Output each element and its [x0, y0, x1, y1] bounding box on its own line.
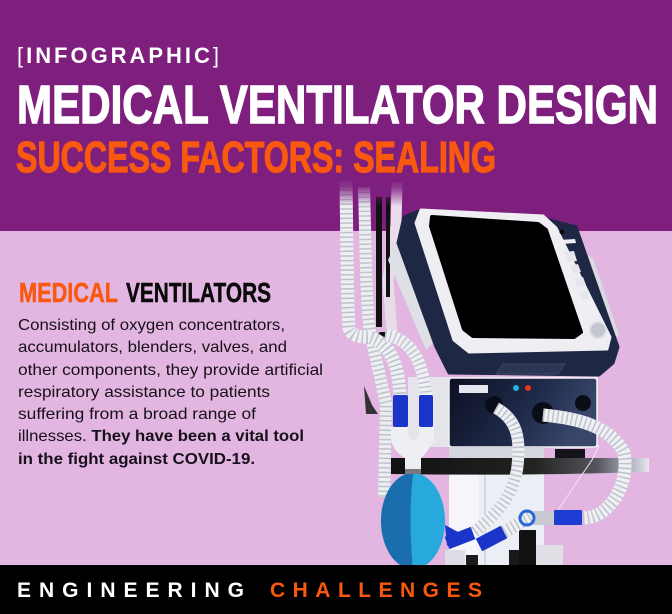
breathing bag: [381, 469, 445, 569]
monitor dark housing: [398, 211, 618, 375]
footer heading: engineering challenges: [17, 579, 482, 602]
text block: description: accumulators, blenders, valves, and: [18, 339, 287, 356]
footer heading: engineering challenges: ENGINEERING: [17, 579, 244, 602]
mounting rods: [364, 197, 400, 414]
top fade into header: [340, 180, 402, 205]
panel: purple header: [0, 0, 672, 231]
heading: medical ventilators: MEDICAL: [19, 277, 118, 308]
heading: medical ventilators: VENTILATORS: [126, 277, 271, 308]
control unit body: [408, 377, 598, 447]
base column: [445, 470, 563, 565]
kicker: infographic: [INFOGRAPHIC]: [17, 43, 219, 68]
subtitle: SUCCESS FACTORS: SEALING: [16, 133, 496, 182]
text block: description: in the fight against COVID-19.: [18, 451, 255, 468]
monitor white frame: [416, 210, 610, 352]
hose and lower connectors: [445, 510, 582, 546]
third hose: [385, 335, 426, 397]
left hose: [346, 180, 400, 396]
heading: medical ventilators: [19, 277, 271, 308]
footer bar: [0, 565, 672, 614]
monitor grey back plate: [388, 243, 433, 350]
text block: description: respiratory assistance to patients: [18, 384, 270, 401]
far hose behind monitor: [388, 182, 397, 335]
text block: description: other components, they provide artificial: [18, 362, 323, 379]
text block: description: suffering from a broad range of: [18, 406, 257, 423]
status lights: [513, 385, 531, 391]
panel: pink body: [0, 231, 672, 565]
screen: [431, 217, 581, 337]
illustration: medical ventilator machine: [338, 178, 649, 569]
monitor right edge: [586, 255, 619, 338]
thin wire: [558, 445, 599, 510]
text block: description: [18, 317, 323, 468]
text block: description: illnesses. They have been a vital tool: [18, 428, 304, 445]
knobs: [485, 395, 591, 424]
text block: description: Consisting of oxygen concentrators,: [18, 317, 285, 334]
monitor vent: [496, 364, 565, 374]
control panel: [449, 378, 597, 447]
hose from first knob: [473, 408, 519, 533]
back hose: [364, 187, 386, 497]
tray neck: [449, 447, 544, 459]
panel label: [459, 385, 488, 393]
tray: [391, 458, 649, 475]
hose from second knob: [543, 415, 625, 518]
blue connectors: [393, 395, 433, 427]
footer heading: engineering challenges: CHALLENGES: [270, 579, 482, 602]
monitor buttons: [559, 230, 606, 338]
Y connector: [391, 427, 434, 472]
